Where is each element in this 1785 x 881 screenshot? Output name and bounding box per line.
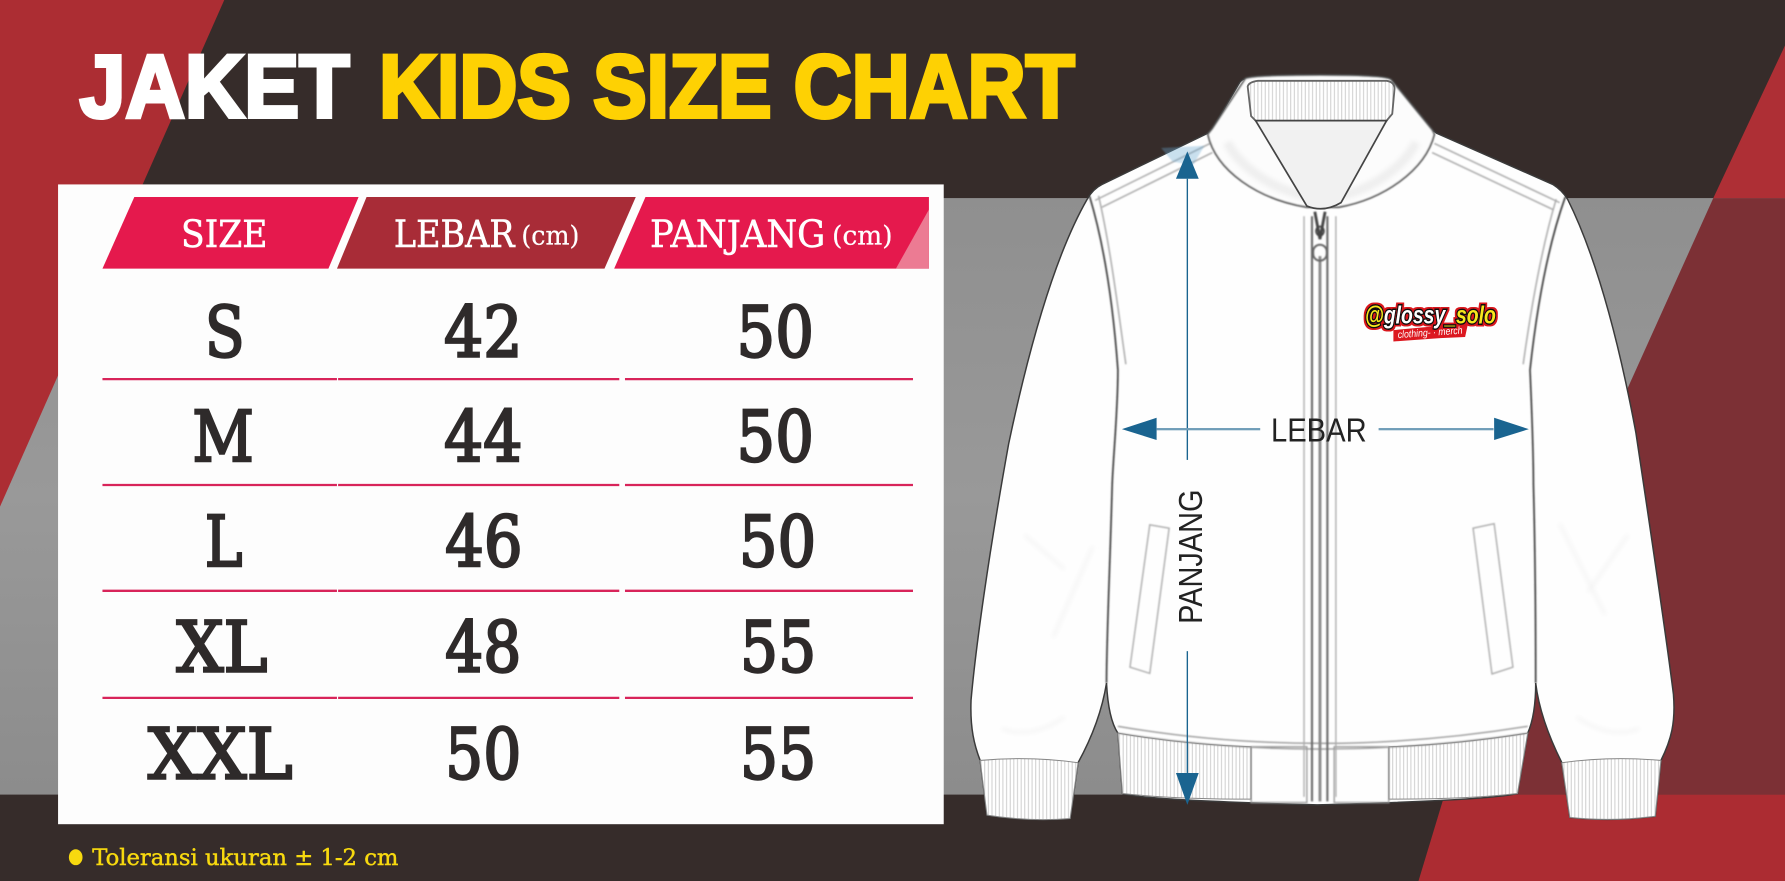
jacket illustration	[971, 75, 1674, 820]
logo: glossy solo: @glossy_solo	[1365, 301, 1496, 329]
logo: glossy solo: clothing- · merch	[1397, 326, 1463, 341]
row M: 44	[444, 395, 523, 478]
title: KIDS SIZE CHART	[379, 37, 1075, 136]
row XL: 48	[445, 606, 521, 689]
row S: 42	[444, 290, 523, 373]
collar	[1208, 75, 1434, 209]
sleeve seams	[1089, 196, 1565, 683]
hem centre panels	[1118, 726, 1528, 803]
arrow: panjang	[1176, 151, 1199, 805]
panel: size table	[58, 184, 944, 824]
row S	[205, 290, 814, 373]
row XL: 55	[740, 606, 816, 689]
row XXL: XXL	[148, 713, 293, 796]
row M	[192, 395, 814, 478]
row L: 46	[445, 500, 523, 583]
zipper	[1304, 212, 1336, 801]
title: JAKET	[80, 37, 349, 136]
row XXL	[148, 713, 816, 796]
cuffs and hem ribbing	[980, 733, 1661, 820]
sleeve folds	[1002, 524, 1639, 732]
header cell: lebar: LEBAR	[394, 212, 516, 256]
row L: 50	[739, 500, 816, 583]
row XL: XL	[176, 606, 268, 689]
row XXL: 55	[740, 713, 816, 796]
header cell: lebar: (cm)	[521, 222, 579, 252]
label: lebar: LEBAR	[1271, 412, 1367, 449]
arrow: lebar	[1122, 418, 1529, 440]
pockets	[1130, 524, 1513, 674]
table header row	[102, 197, 929, 269]
label: panjang: PANJANG	[1172, 490, 1209, 624]
shoulder smudge	[1161, 146, 1204, 165]
logo: glossy solo	[1365, 301, 1496, 342]
row M: M	[192, 395, 254, 478]
row M: 50	[737, 395, 814, 478]
row S: S	[205, 290, 245, 373]
row XXL: 50	[445, 713, 521, 796]
row S: 50	[737, 290, 814, 373]
header cell: size	[102, 197, 359, 269]
row XL	[176, 606, 816, 689]
header cell: panjang: (cm)	[832, 222, 892, 252]
title	[80, 37, 1075, 136]
row L: L	[205, 500, 242, 583]
footnote: size tolerance: Toleransi ukuran ± 1-2 cm	[92, 845, 398, 871]
header cell: panjang	[614, 197, 929, 269]
header cell: size: SIZE	[181, 212, 268, 256]
jacket silhouette	[971, 75, 1674, 820]
header cell: panjang: PANJANG	[650, 212, 825, 256]
header cell: lebar	[337, 197, 636, 269]
row L	[205, 500, 816, 583]
